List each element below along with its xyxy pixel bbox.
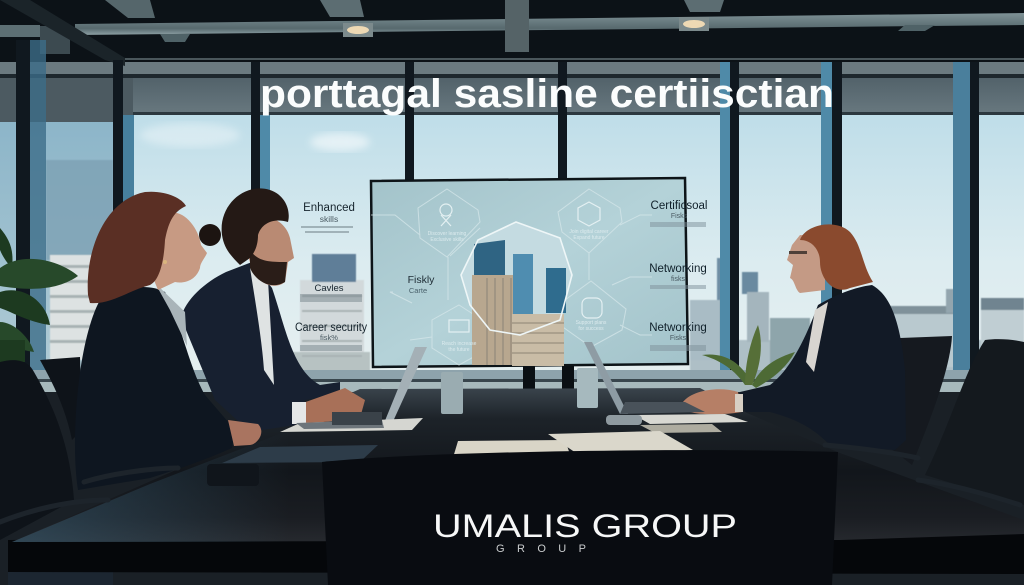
head — [787, 235, 825, 293]
presentation screen — [371, 178, 688, 367]
screen labels: Fiskly — [408, 274, 435, 286]
conference table — [8, 388, 1024, 574]
plant left — [0, 228, 78, 362]
screen labels — [408, 202, 609, 353]
jacket — [75, 287, 235, 490]
left laptop — [382, 347, 427, 428]
right laptop — [584, 342, 628, 414]
papers — [452, 440, 572, 461]
screen labels: Exclusive skills — [430, 237, 464, 243]
label: career security: fisk% — [320, 333, 338, 342]
body — [181, 262, 340, 432]
label: networking upper: Networking — [649, 263, 707, 275]
hexagon icons — [440, 202, 602, 332]
back chairs — [0, 336, 1024, 540]
logo: UMALIS GROUP — [433, 508, 737, 544]
label: certification: Certificsoal — [651, 200, 707, 212]
laptops and papers — [207, 342, 748, 486]
screen stand — [523, 362, 574, 398]
screen labels: for success — [578, 326, 604, 332]
upper window bands — [0, 62, 1024, 122]
label: certification: Fisks — [671, 213, 688, 220]
floor strip — [8, 572, 113, 585]
screen labels: Carte — [409, 286, 427, 295]
screen labels: Reach increase — [442, 341, 477, 347]
head — [244, 216, 294, 286]
label: networking lower: Networking — [649, 322, 707, 334]
head — [150, 212, 207, 290]
screen labels: Expand future — [573, 235, 605, 241]
right woman — [683, 224, 906, 450]
screen labels: Join digital career — [569, 229, 609, 235]
window wall with sky — [0, 60, 1024, 400]
glasses — [441, 372, 463, 414]
hexagon diagram lines — [371, 189, 652, 365]
screen labels: Support plans — [576, 320, 607, 326]
left woman — [75, 192, 261, 490]
logo: GROUP — [496, 543, 586, 555]
side chair arms — [0, 445, 1020, 522]
label: networking upper: fisks — [671, 276, 686, 283]
label: networking upper — [649, 263, 707, 289]
label: career security — [295, 322, 367, 351]
label: certification — [650, 200, 707, 227]
title: porttagal sasline certiisctian — [260, 72, 834, 116]
label: cavles — [300, 283, 362, 302]
floating labels left of the screen — [295, 202, 367, 351]
label: enhanced skills: skills — [320, 214, 338, 224]
window mullions — [0, 40, 1024, 402]
screen labels: Discover learning — [428, 231, 467, 237]
label: networking lower — [649, 322, 707, 351]
city skyline — [46, 160, 1024, 390]
floating labels right of the screen — [649, 200, 707, 351]
label: enhanced skills: Enhanced — [303, 202, 355, 214]
man — [181, 188, 365, 432]
screen labels: the future — [448, 347, 470, 353]
central skyline medallion — [461, 222, 572, 366]
label: networking lower: Fisks — [670, 335, 687, 342]
front chair — [322, 450, 838, 585]
label: career security: Career security — [295, 322, 367, 334]
logo — [433, 508, 737, 555]
plant right — [702, 325, 795, 388]
lower wall behind table — [0, 392, 1024, 585]
ceiling — [0, 0, 1024, 66]
label: enhanced skills — [301, 202, 355, 233]
label: cavles: Cavles — [314, 283, 344, 294]
